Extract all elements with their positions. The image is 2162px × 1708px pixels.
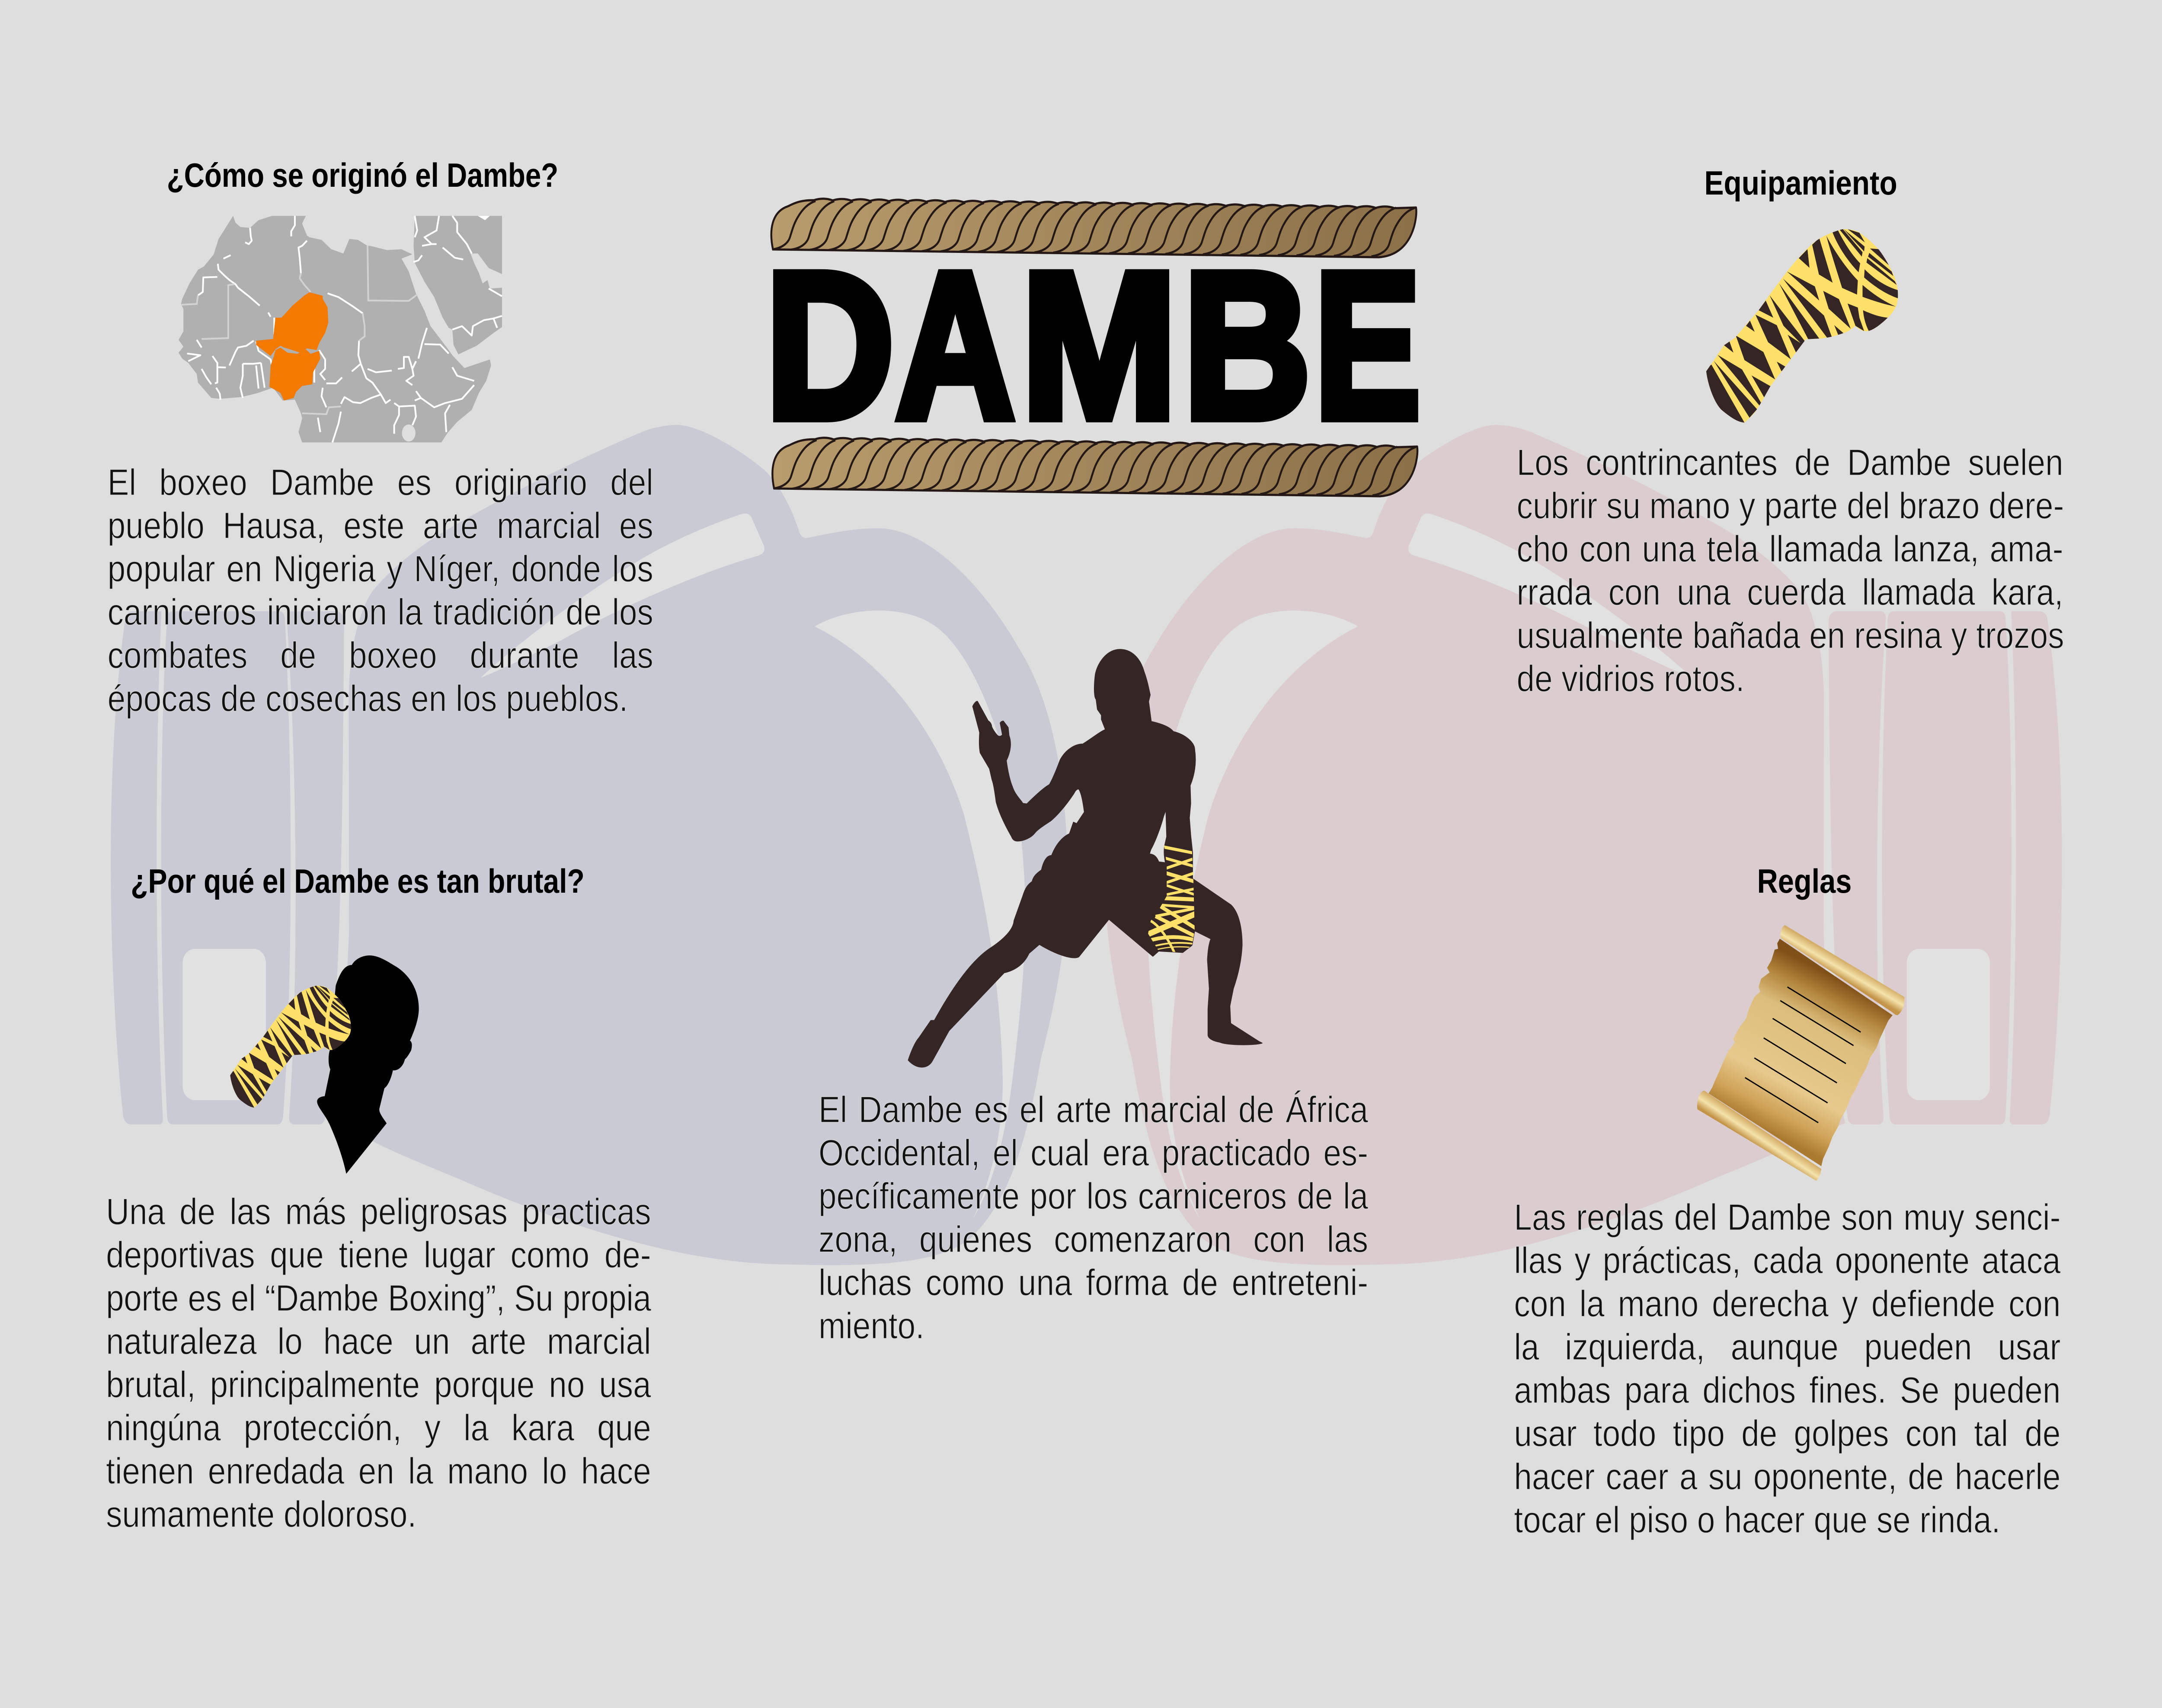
heading: origin: ¿Cómo se originó el Dambe? [167, 156, 558, 194]
text block: origin [108, 461, 653, 721]
text block: brutality: deportivas que tiene lugar como de- [106, 1235, 651, 1276]
text block: introduction: miento. [819, 1306, 924, 1347]
text block: brutality: Una de las más peligrosas practicas [106, 1191, 651, 1232]
title: E [1314, 229, 1420, 461]
text block: rules: ambas para dichos fines. Se pueden [1514, 1370, 2060, 1411]
text block: origin: épocas de cosechas en los pueblos. [108, 678, 628, 719]
rope: top [771, 199, 1416, 257]
icon: wrapped fist punching [228, 986, 351, 1108]
text block: origin: pueblo Hausa, este arte marcial es [108, 505, 653, 546]
icon: parchment scroll with text lines [1697, 925, 1904, 1181]
text block: rules: hacer caer a su oponente, de hacerle [1514, 1456, 2060, 1497]
title [756, 242, 1436, 445]
text block: origin: El boxeo Dambe es originario del [108, 462, 653, 503]
text block: brutality [106, 1191, 651, 1536]
text block: origin: carniceros iniciaron la tradición de los [108, 592, 653, 633]
text block: brutality: porte es el “Dambe Boxing”, Su propia [106, 1278, 651, 1319]
text block: rules: con la mano derecha y defiende con [1514, 1283, 2060, 1325]
background glove: blue [111, 425, 1068, 1265]
text block: brutality: tienen enredada en la mano lo hace [106, 1451, 651, 1492]
map of Africa with Niger and Nigeria highlighted [179, 216, 502, 442]
icon: head silhouette being punched [317, 955, 419, 1174]
text block: equipment: usualmente bañada en resina y trozos [1517, 615, 2064, 656]
text block: equipment: de vidrios rotos. [1517, 658, 1745, 699]
rope: bottom [772, 438, 1417, 496]
text block: introduction [819, 1089, 1368, 1348]
text block: rules: tocar el piso o hacer que se rinda. [1514, 1500, 2000, 1541]
text block: rules: usar todo tipo de golpes con tal de [1514, 1413, 2060, 1454]
title: D [766, 229, 894, 461]
icon: wrapped fist, equipment [1703, 229, 1898, 423]
text block: introduction: El Dambe es el arte marcial de África [819, 1089, 1368, 1130]
artwork layer [106, 162, 2063, 1540]
background glove: red [1105, 425, 2062, 1265]
title: B [1183, 229, 1311, 461]
heading: brutality: ¿Por qué el Dambe es tan brutal? [131, 862, 585, 900]
text block: equipment: cubrir su mano y parte del brazo dere- [1517, 485, 2064, 527]
text block: introduction: Occidental, el cual era practicado es- [819, 1133, 1368, 1174]
text block: rules: la izquierda, aunque pueden usar [1514, 1327, 2060, 1368]
text block: brutality: ningúna protección, y la kara que [106, 1408, 651, 1449]
title: A [896, 229, 1014, 461]
text block: equipment: cho con una tela llamada lanza, ama- [1517, 529, 2063, 570]
text block: rules: Las reglas del Dambe son muy senci- [1514, 1197, 2060, 1238]
title: M [1021, 229, 1177, 461]
text block: brutality: naturaleza lo hace un arte marcial [106, 1321, 651, 1362]
text block: brutality: sumamente doloroso. [106, 1494, 416, 1535]
text block: introduction: zona, quienes comenzaron con las [819, 1219, 1368, 1260]
icon: fighter silhouette with wrapped hand [908, 649, 1262, 1067]
text block: rules: llas y prácticas, cada oponente ataca [1514, 1240, 2060, 1281]
page [106, 162, 2063, 1540]
text block: brutality: brutal, principalmente porque no usa [106, 1364, 651, 1405]
text block: equipment [1517, 441, 2063, 701]
text block: rules [1514, 1196, 2060, 1542]
text block: origin: combates de boxeo durante las [108, 635, 653, 676]
text block: origin: popular en Nigeria y Níger, donde los [108, 549, 653, 590]
text block: introduction: pecíficamente por los carniceros de la [819, 1176, 1368, 1217]
text block: equipment: Los contrincantes de Dambe suelen [1517, 442, 2063, 483]
heading: rules: Reglas [1757, 862, 1852, 900]
text block: equipment: rrada con una cuerda llamada kara, [1517, 572, 2063, 613]
text block: introduction: luchas como una forma de entreteni- [819, 1262, 1368, 1303]
heading: equipment: Equipamiento [1704, 164, 1897, 202]
